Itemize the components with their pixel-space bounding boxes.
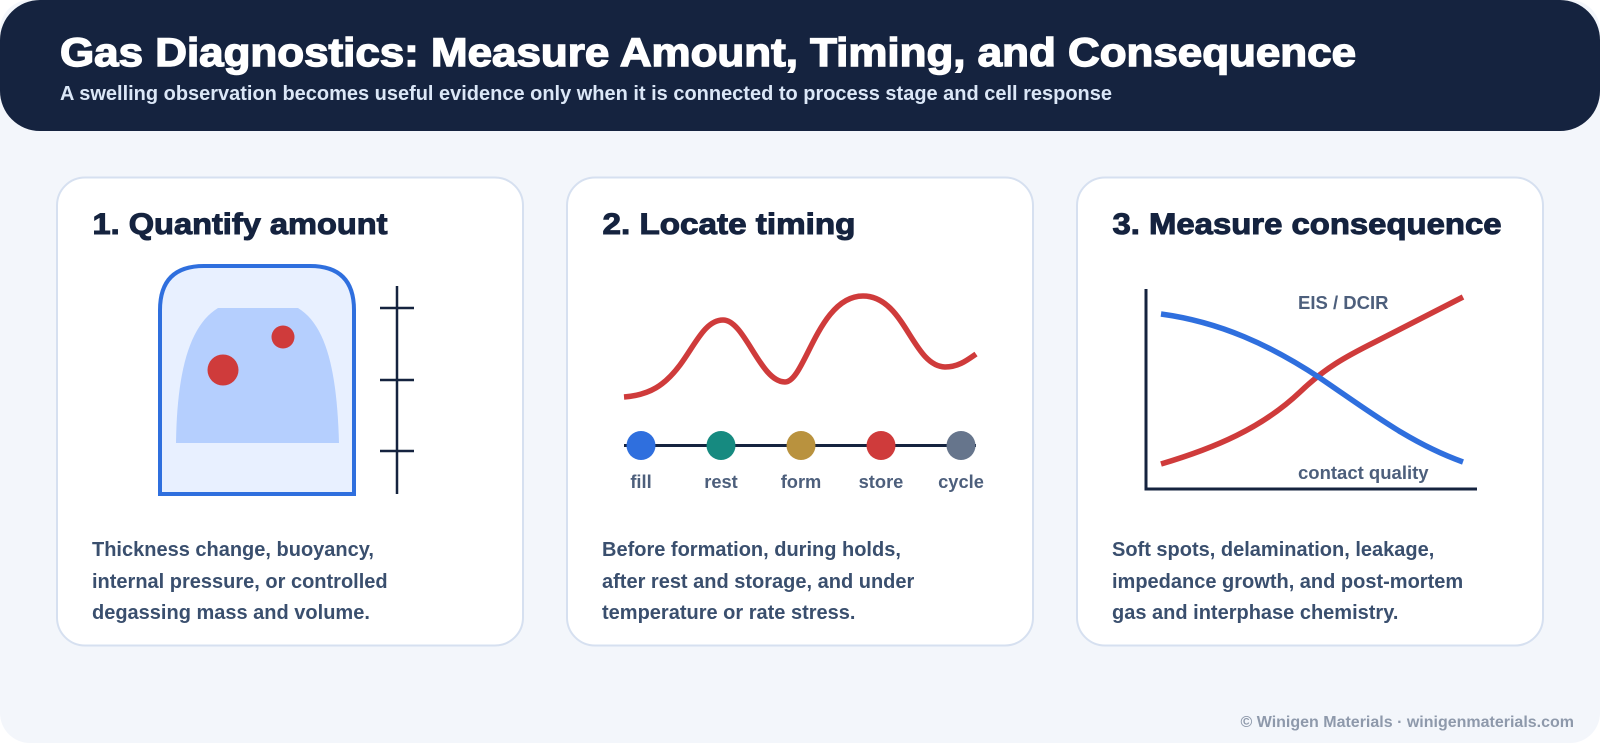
- footer credit: © Winigen Materials · winigenmaterials.com: [1240, 714, 1574, 731]
- description: temperature or rate stress.: [602, 602, 855, 624]
- heading: 3. Measure consequence: [1112, 208, 1502, 241]
- description: impedance growth, and post-mortem: [1112, 571, 1463, 593]
- title: Gas Diagnostics: Measure Amount, Timing, and Consequence: [60, 31, 1356, 75]
- panel: measure consequence: [1077, 178, 1543, 646]
- description: after rest and storage, and under: [602, 571, 915, 593]
- description: degassing mass and volume.: [92, 602, 370, 624]
- stage: rest: rest: [704, 471, 738, 492]
- description: Soft spots, delamination, leakage,: [1112, 539, 1434, 561]
- description: Before formation, during holds,: [602, 539, 901, 561]
- stage: form: form: [781, 471, 821, 492]
- description: gas and interphase chemistry.: [1112, 602, 1398, 624]
- stage: store: store: [859, 471, 903, 492]
- stage: fill: fill: [630, 471, 652, 492]
- stage: form: [781, 431, 821, 492]
- stage: fill: [626, 431, 656, 492]
- process timeline: [624, 431, 984, 492]
- stage: cycle: [938, 431, 984, 492]
- header banner: [0, 0, 1600, 131]
- heading: 2. Locate timing: [602, 208, 856, 241]
- stage: rest: [704, 431, 738, 492]
- stage: cycle: cycle: [938, 471, 984, 492]
- stage: store: [859, 431, 903, 492]
- label: EIS / DCIR: [1298, 292, 1388, 313]
- chart: response curves: [1146, 289, 1477, 489]
- heading: 1. Quantify amount: [92, 208, 388, 241]
- icon: cell with gas pocket: [160, 266, 354, 494]
- panel: quantify amount: [57, 178, 523, 646]
- line chart: gas curve: [624, 296, 976, 397]
- description: Thickness change, buoyancy,: [92, 539, 374, 561]
- panel: locate timing: [567, 178, 1033, 646]
- subtitle: A swelling observation becomes useful evidence only when it is connected to process stage and cell response: [60, 83, 1112, 105]
- icon: measurement scale: [380, 286, 414, 494]
- description: internal pressure, or controlled: [92, 571, 388, 593]
- label: contact quality: [1298, 462, 1429, 483]
